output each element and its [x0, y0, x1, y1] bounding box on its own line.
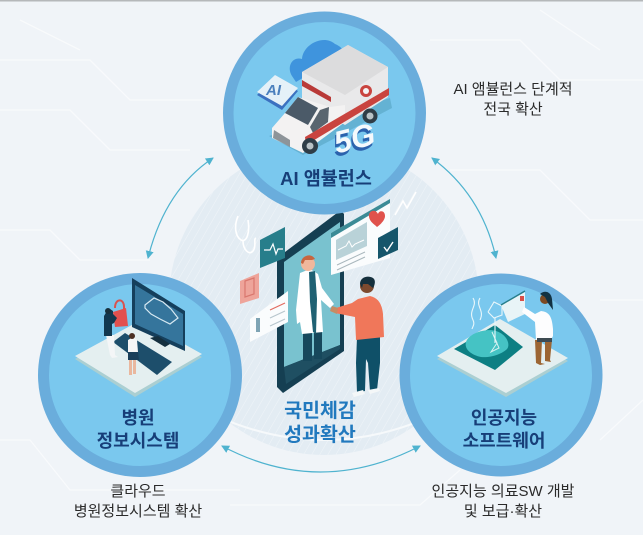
caption: AI 앰뷸런스: AI 앰뷸런스 단계적 [453, 81, 573, 98]
body chart card [250, 291, 288, 342]
arrow: left to right [222, 446, 420, 472]
heading: 국민체감 성과확산: 국민체감 [284, 400, 356, 422]
check tile [378, 227, 398, 259]
screen card [501, 291, 525, 322]
icon: keyboard [113, 333, 172, 375]
caption: AI 앰뷸런스: 전국 확산 [483, 101, 543, 118]
isometric platform [437, 322, 568, 397]
arrow: top to left [148, 158, 213, 258]
doctor [296, 255, 334, 361]
circle label: 인공지능 [471, 408, 537, 428]
caption: 인공지능 의료SW: 인공지능 의료SW 개발 [432, 483, 575, 500]
panel: 병원 정보시스템 [38, 273, 242, 477]
caption: 병원정보시스템: 병원정보시스템 확산 [74, 503, 202, 520]
vital sign tile [260, 227, 285, 268]
5G badge: 5G [330, 116, 379, 160]
icon: ambulance [269, 45, 392, 155]
heading: 국민체감 성과확산: 성과확산 [284, 424, 356, 446]
patient [330, 277, 384, 397]
circle label: AI 앰뷸런스 [280, 168, 372, 189]
icon: AI tile: AI [265, 82, 282, 99]
circle label: 정보시스템 [97, 431, 179, 451]
caption: 인공지능 의료SW: 및 보급·확산 [464, 503, 542, 520]
icon: padlock [113, 300, 128, 327]
phone screen [284, 222, 340, 367]
monitor card [331, 199, 390, 275]
icon: monitor [132, 278, 185, 351]
arrow: top to right [432, 158, 496, 258]
phone illustration [236, 192, 416, 397]
cycle arrows [148, 158, 496, 472]
circle label: 병원 [121, 408, 155, 428]
icon: DNA [472, 298, 502, 343]
panel: 인공지능 소프트웨어 [400, 274, 602, 476]
decorative line icons [236, 192, 416, 253]
heart [369, 211, 385, 227]
figure: woman [128, 333, 139, 375]
panel: AI 앰뷸런스 [223, 12, 426, 214]
figure: man [104, 308, 118, 358]
isometric platform [75, 323, 202, 397]
central disc [169, 145, 479, 455]
phone body [277, 212, 344, 393]
circle label: 소프트웨어 [463, 431, 545, 451]
icon: AI tile [257, 75, 298, 110]
5G badge: 5G [329, 120, 378, 164]
icon: cloud [290, 40, 344, 82]
caption: 병원정보시스템: 클라우드 [110, 483, 166, 500]
figure: scientist [522, 292, 553, 365]
report tile [240, 273, 259, 304]
icon: AI chip [454, 325, 523, 370]
